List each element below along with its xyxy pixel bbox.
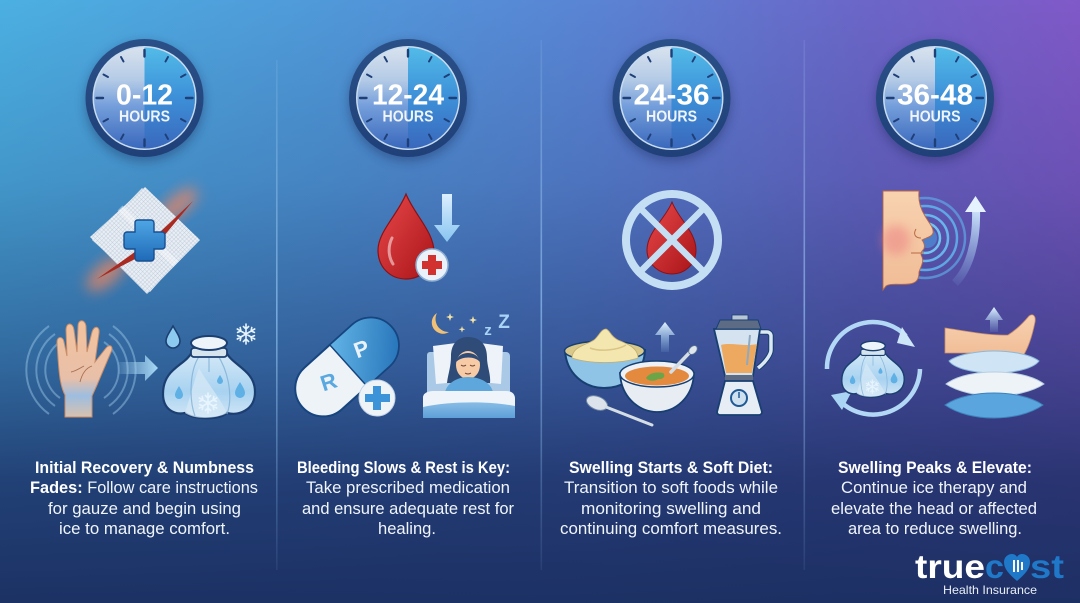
clock: 0-12 hours: HOURS	[119, 108, 170, 126]
text: 12-24 hours description	[297, 459, 514, 538]
text: 12-24 hours description: Take prescribed medication	[306, 479, 510, 497]
clock: 0-12 hours: 0-12	[116, 80, 173, 112]
logo: truecost Health Insurance: st	[1030, 548, 1064, 585]
text: 24-36 hours description: monitoring swelling and	[581, 500, 761, 518]
icon: gauze with cross over wound	[81, 182, 203, 298]
text: 36-48 hours description: Swelling Peaks & Elevate:	[838, 459, 1032, 477]
clock: 24-36 hours	[612, 39, 732, 162]
text: 0-12 hours description: for gauze and begin using	[48, 500, 241, 518]
icon: swelling waves	[885, 198, 965, 278]
clock: 24-36 hours: 24-36	[634, 80, 710, 112]
text: 24-36 hours description	[560, 459, 782, 538]
icon: foot elevated on pillows	[945, 315, 1044, 418]
panel: 24-36 hours	[560, 39, 782, 538]
text: 24-36 hours description: Swelling Starts & Soft Diet:	[569, 459, 773, 477]
text: 12-24 hours description: Bleeding Slows & Rest is Key:	[297, 459, 510, 477]
panel: 36-48 hours	[827, 39, 1044, 538]
icon: mashed potatoes bowl	[564, 329, 645, 388]
icon: medication capsule: R	[317, 367, 340, 396]
clock: 36-48 hours	[875, 39, 995, 162]
logo: truecost Health Insurance: c	[985, 548, 1004, 585]
arrow: curved swelling up	[955, 196, 986, 283]
icon: soup bowl with spoon	[620, 344, 699, 412]
icon: medication capsule: P	[350, 335, 373, 363]
text: 0-12 hours description: Fades: Follow care instructions	[30, 479, 258, 497]
text: 24-36 hours description: Transition to soft foods while	[564, 479, 778, 497]
clock: 12-24 hours: HOURS	[382, 108, 434, 126]
text: 12-24 hours description: healing.	[378, 520, 436, 538]
clock: 12-24 hours: 12-24	[372, 80, 444, 112]
icon: medication capsule	[284, 306, 410, 428]
icon: person resting in bed: Z	[498, 312, 510, 333]
text: 0-12 hours description: ice to manage comfort.	[59, 520, 230, 538]
logo: truecost Health Insurance: Health Insurance	[943, 583, 1037, 597]
panel: 12-24 hours	[284, 39, 515, 538]
icon: blood drop with plus badge	[378, 194, 448, 281]
panel: 0-12 hours	[26, 39, 258, 538]
icon: blender	[714, 315, 771, 415]
clock: 36-48 hours: HOURS	[910, 108, 961, 126]
logo: truecost Health Insurance	[915, 548, 1064, 597]
icon: person resting in bed	[423, 312, 515, 418]
text: 12-24 hours description: and ensure adequate rest for	[302, 500, 514, 518]
icon: person resting in bed: z	[484, 322, 492, 339]
text: 0-12 hours description: Initial Recovery & Numbness	[35, 459, 254, 477]
arrow: soft diet up	[655, 322, 675, 352]
clock: 12-24 hours	[348, 39, 468, 162]
clock: 24-36 hours: HOURS	[646, 108, 697, 126]
text: 36-48 hours description: Continue ice therapy and	[841, 479, 1027, 497]
icon: ice pack with water drop and snowflake	[163, 324, 255, 418]
icon: numb hand with waves	[26, 321, 136, 417]
arrow: elevate up	[985, 307, 1003, 332]
text: 36-48 hours description	[831, 459, 1037, 538]
text: 24-36 hours description: continuing comfort measures.	[560, 520, 782, 538]
clock: 0-12 hours	[84, 39, 204, 162]
text: 36-48 hours description: area to reduce swelling.	[848, 520, 1022, 538]
clock: 36-48 hours: 36-48	[897, 80, 973, 112]
icon: no bleeding symbol	[626, 194, 718, 286]
icon: swollen face profile	[882, 191, 933, 290]
logo: truecost Health Insurance: true	[915, 548, 985, 585]
text: 0-12 hours description	[30, 459, 258, 538]
arrow: bleeding slows	[434, 194, 460, 242]
text: 36-48 hours description: elevate the head or affected	[831, 500, 1037, 518]
arrow: numbness to ice	[118, 355, 158, 381]
icon: spoon	[584, 393, 652, 425]
icon: ice therapy cycle	[827, 322, 920, 415]
